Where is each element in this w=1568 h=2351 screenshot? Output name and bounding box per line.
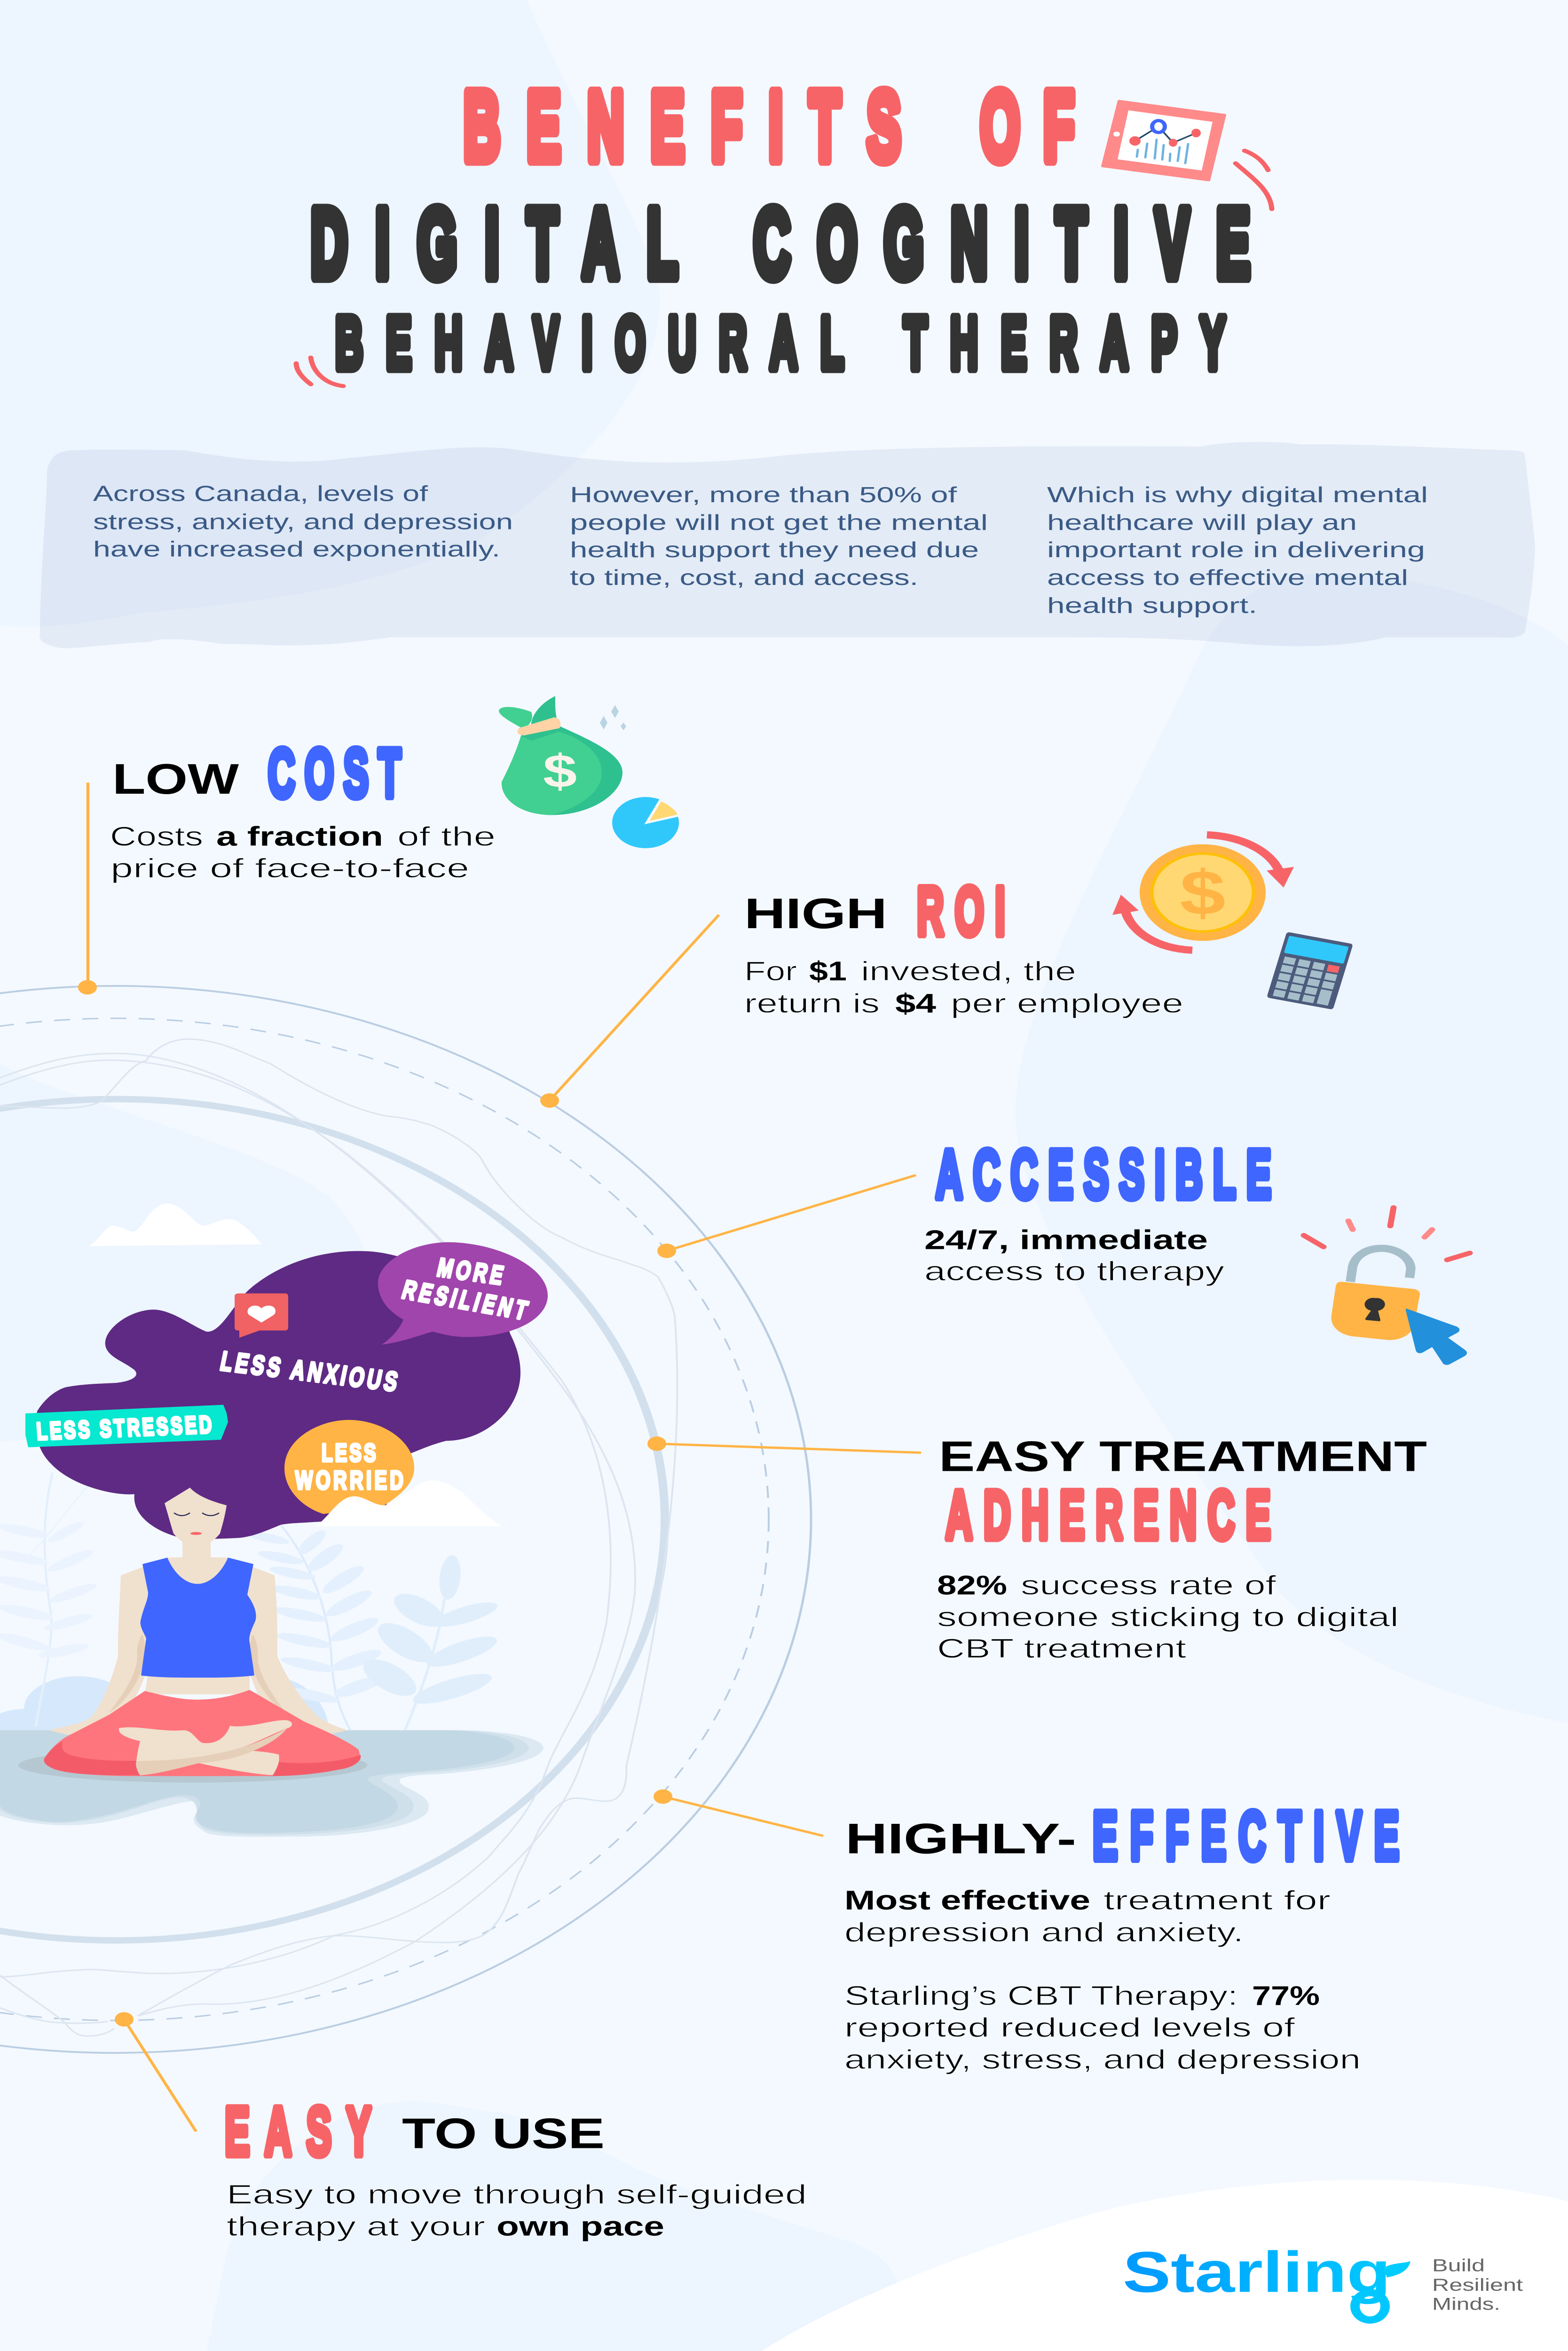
icon: money bag and pie: $ xyxy=(543,745,577,797)
illustration: hair xyxy=(36,1251,520,1539)
panel: low cost xyxy=(110,696,679,884)
text: adherence body: CBT treatment xyxy=(937,1634,1187,1664)
speech bubble: more resilient: RESILIENT xyxy=(399,1275,531,1325)
tagline: Build xyxy=(1432,2256,1485,2275)
icon: heart message xyxy=(235,1294,288,1338)
heading: easy treatment adherence: EASY TREATMENT xyxy=(939,1433,1427,1480)
title: BEHAVIOURAL xyxy=(335,302,844,384)
heading: high roi xyxy=(744,873,1005,949)
tagline xyxy=(1432,2256,1523,2314)
speech bubble: more resilient xyxy=(378,1242,548,1345)
label: less anxious: LESS ANXIOUS xyxy=(218,1346,400,1397)
panel: high roi xyxy=(744,835,1353,1018)
title: OF xyxy=(980,72,1074,181)
title: BENEFITS xyxy=(464,72,901,181)
plant: left fern xyxy=(0,1473,99,1727)
text: easy to use body: own pace xyxy=(496,2212,664,2242)
text: high roi body: return is xyxy=(744,989,880,1018)
logo: starling: Starling xyxy=(1123,2240,1391,2304)
text: effectiveness body: treatment for xyxy=(1103,1886,1331,1916)
icon: coin with arrows: $ xyxy=(1180,858,1226,928)
heading: easy to use: TO USE xyxy=(402,2110,605,2157)
text: effectiveness body: Starling’s CBT Therapy: xyxy=(844,1981,1238,2011)
text: adherence body: 82% xyxy=(937,1570,1007,1601)
heading: easy to use: EASY xyxy=(225,2093,371,2170)
plant: centre fern xyxy=(247,1525,387,1730)
text: adherence body: someone sticking to digital xyxy=(937,1602,1399,1632)
text: high roi body: For xyxy=(744,956,797,986)
label: less stressed: LESS STRESSED xyxy=(36,1411,213,1445)
text: effectiveness body: anxiety, stress, and depression xyxy=(844,2045,1361,2075)
text: high roi body: $1 xyxy=(809,956,847,986)
icon: padlock and cursor xyxy=(1304,1207,1470,1365)
plant: right leaves xyxy=(355,1554,502,1739)
icon: calculator xyxy=(1267,932,1353,1010)
heading: high roi: ROI xyxy=(917,873,1005,949)
title: COGNITIVE xyxy=(754,189,1250,298)
text: low cost body: a fraction xyxy=(216,822,383,852)
heading: low cost: COST xyxy=(268,735,401,811)
text: column three xyxy=(1047,483,1428,618)
heading: easy treatment adherence: ADHERENCE xyxy=(946,1477,1271,1553)
figure: waist xyxy=(145,1673,250,1694)
connector dots xyxy=(78,980,676,2027)
heading: highly effective: HIGHLY- xyxy=(845,1815,1076,1862)
bubble: less worried: WORRIED xyxy=(295,1467,403,1495)
panel: accessible xyxy=(924,1136,1470,1365)
figure: coral legs xyxy=(44,1690,361,1776)
text: adherence body xyxy=(937,1570,1399,1664)
text: column two: people will not get the mental xyxy=(570,511,988,535)
icon: accent arcs bottom left xyxy=(296,358,343,386)
heading: high roi: HIGH xyxy=(744,890,887,938)
text: column one: stress, anxiety, and depression xyxy=(93,510,513,534)
text: high roi body xyxy=(744,956,1183,1018)
plants background xyxy=(0,1473,502,1762)
text: column three: health support. xyxy=(1047,594,1257,618)
figure: neck and arms xyxy=(49,1536,347,1735)
icon: tablet with chart xyxy=(1103,101,1225,180)
text: low cost body: price of face-to-face xyxy=(110,853,469,884)
text: adherence body: success rate of xyxy=(1021,1570,1276,1601)
text: low cost body: of the xyxy=(397,822,496,852)
text: column two: health support they need due xyxy=(570,538,979,562)
connector lines xyxy=(88,782,921,2131)
icon: money bag and pie xyxy=(499,696,679,848)
heading: easy to use xyxy=(225,2093,605,2170)
text: accessible body xyxy=(924,1225,1225,1286)
panel: easy treatment adherence xyxy=(937,1433,1427,1664)
illustration: meditating woman xyxy=(44,1488,361,1776)
text: column three: important role in delivering xyxy=(1047,538,1425,562)
figure: face xyxy=(165,1488,227,1546)
text: column two xyxy=(570,483,988,590)
heading: low cost: LOW xyxy=(112,755,239,803)
text: low cost body: Costs xyxy=(110,822,203,852)
text: accessible body: 24/7, immediate xyxy=(924,1225,1208,1255)
text: high roi body: per employee xyxy=(951,989,1183,1018)
text: effectiveness body: Most effective xyxy=(844,1886,1090,1916)
bubble: less worried: LESS xyxy=(322,1439,376,1467)
text: high roi body: invested, the xyxy=(861,956,1076,986)
text: column three: healthcare will play an xyxy=(1047,511,1357,535)
cloud right xyxy=(315,1481,503,1526)
concentric rings xyxy=(0,986,811,2053)
figure: crossed legs xyxy=(119,1720,292,1775)
panel: highly effective xyxy=(844,1798,1399,2075)
panel: intro banner xyxy=(39,442,1535,648)
icon: accent arcs top right xyxy=(1236,150,1272,209)
title: DIGITAL xyxy=(311,189,678,298)
text: column two: to time, cost, and access. xyxy=(570,566,918,590)
text: column one: Across Canada, levels of xyxy=(93,482,428,506)
text: effectiveness body: depression and anxiety. xyxy=(844,1917,1244,1948)
speech bubble: more resilient: MORE xyxy=(434,1253,506,1290)
text: column one: have increased exponentially. xyxy=(93,537,500,561)
text: accessible body: access to therapy xyxy=(924,1256,1225,1286)
text: easy to use body xyxy=(227,2180,807,2242)
heading: highly effective: EFFECTIVE xyxy=(1093,1798,1399,1874)
text: column one xyxy=(93,482,513,561)
tagline: Resilient xyxy=(1432,2275,1523,2295)
text: column three: access to effective mental xyxy=(1047,566,1408,590)
water pond xyxy=(0,1730,544,1837)
bubble: less worried xyxy=(284,1420,414,1514)
icon: coin with arrows xyxy=(1112,835,1294,950)
figure: blue top xyxy=(141,1558,256,1678)
text: column three: Which is why digital mental xyxy=(1047,483,1428,507)
text: high roi body: $4 xyxy=(895,989,936,1018)
text: effectiveness body xyxy=(844,1886,1361,2075)
text: effectiveness body: reported reduced levels of xyxy=(844,2013,1295,2043)
tagline: Minds. xyxy=(1432,2295,1500,2314)
cloud left xyxy=(89,1204,262,1246)
panel: easy to use xyxy=(225,2093,807,2242)
text: low cost body xyxy=(110,822,496,884)
text: column two: However, more than 50% of xyxy=(570,483,957,507)
title: THERAPY xyxy=(904,302,1226,384)
heading: highly effective xyxy=(845,1798,1399,1874)
text: easy to use body: therapy at your xyxy=(227,2212,485,2242)
title xyxy=(311,72,1250,384)
heading: easy treatment adherence xyxy=(939,1433,1427,1553)
logo: starling xyxy=(1123,2240,1523,2320)
heading: accessible: ACCESSIBLE xyxy=(936,1136,1271,1213)
text: easy to use body: Easy to move through self-guided xyxy=(227,2180,807,2209)
text: effectiveness body: 77% xyxy=(1252,1981,1320,2011)
heading: low cost xyxy=(112,735,401,811)
